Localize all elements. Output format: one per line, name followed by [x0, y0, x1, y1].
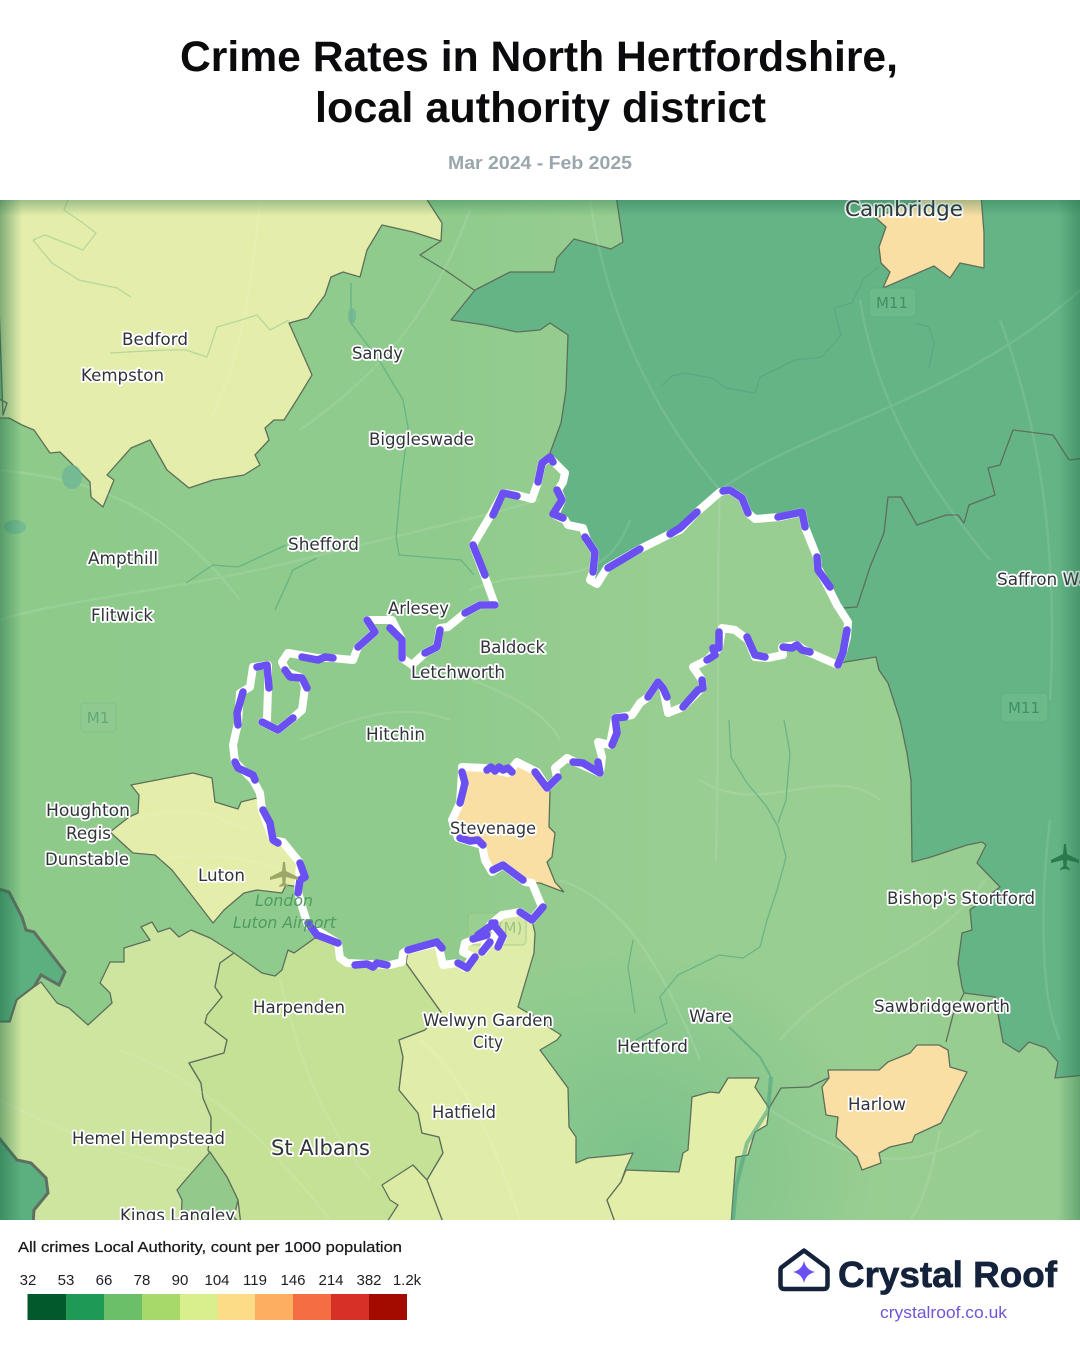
road shield: M1: M1: [87, 709, 109, 727]
district boundary: north of Central Bedfordshire: [420, 241, 474, 290]
subtitle: date range: Mar 2024 - Feb 2025: [448, 153, 632, 173]
place labels: Ware: [689, 1007, 732, 1026]
legend scale values: 32: [20, 1272, 36, 1289]
legend scale values: [20, 1272, 422, 1289]
road shield: M11 east: [1010, 702, 1039, 713]
place labels: Hatfield: [432, 1103, 496, 1122]
district: Welwyn Hatfield, pale yellow: [399, 912, 633, 1225]
place labels: Sawbridgeworth: [874, 997, 1010, 1016]
district: South Cambridgeshire and Uttlesford, dark green: [451, 195, 1080, 1078]
legend colour swatches: [28, 1294, 407, 1320]
place labels: Hertford: [617, 1037, 688, 1056]
legend scale values: 1.2k: [393, 1272, 422, 1289]
airport label: Luton Airport: [233, 913, 337, 932]
place labels: Houghton: [46, 801, 130, 820]
district: Stevenage, cream: [452, 762, 564, 892]
district: Buckinghamshire corner, dark green: [0, 888, 65, 1022]
road shield: M1: [81, 703, 116, 732]
map base: mid-green districts: [0, 200, 1080, 1220]
legend scale values: 53: [58, 1272, 74, 1289]
district: Luton, pale yellow: [110, 773, 300, 923]
district: Bedford, pale yellow: [0, 195, 442, 507]
district: Harlow, cream: [822, 1045, 967, 1170]
place labels: Shefford: [288, 535, 359, 554]
place labels: Hitchin: [366, 725, 425, 744]
place labels: Luton: [198, 866, 245, 885]
road shield: A1(M): (M): [498, 919, 522, 937]
place labels: Arlesey: [388, 599, 449, 618]
map rivers, thin teal lines: [33, 200, 934, 1220]
district: Uttlesford boundary line: [843, 430, 1080, 608]
legend scale values: 78: [134, 1272, 150, 1289]
district: Broxbourne, pale yellow: [607, 1078, 769, 1225]
legend scale values: 66: [96, 1272, 112, 1289]
district: Hertsmere corner, pale yellow: [382, 1165, 444, 1225]
place labels: Welwyn Garden: [423, 1011, 553, 1030]
title: local authority district: [315, 84, 766, 132]
road shield: M11 north: M11: [876, 294, 908, 312]
water patches: [4, 308, 356, 534]
airport label: London: [255, 891, 313, 910]
district: Dacorum, yellow green: [0, 922, 241, 1225]
icon: airport plane, Stansted: [1051, 844, 1079, 870]
place labels: Letchworth: [411, 663, 505, 682]
legend scale values: 214: [318, 1272, 344, 1289]
North Hertfordshire boundary, white line: [233, 458, 848, 968]
place labels: Bedford: [122, 330, 188, 349]
map edge vignette: [0, 200, 1080, 1220]
wordmark: Crystal Roof: [838, 1254, 1058, 1295]
East Hertfordshire darker south tint: [548, 1013, 806, 1220]
map roads, faint light lines: [0, 200, 1080, 1220]
district boundaries: East Hertfordshire south edge: [769, 993, 964, 1108]
district: St Albans, yellow green: [189, 938, 444, 1225]
place labels: Bishop's Stortford: [887, 889, 1035, 908]
legend scale values: 119: [243, 1272, 267, 1289]
legend scale values: 382: [356, 1272, 382, 1289]
place labels: City: [473, 1033, 503, 1052]
North Hertfordshire boundary, purple dashes: [235, 457, 847, 968]
legend scale values: 104: [204, 1272, 230, 1289]
district: Hillingdon corner, dark green: [0, 1133, 48, 1225]
road shield: M11 north: [878, 288, 907, 308]
logo: Crystal Roof: [780, 1250, 1058, 1322]
place labels: Biggleswade: [369, 430, 474, 449]
legend scale values: 90: [172, 1272, 188, 1289]
legend title: All crimes Local Authority, count per 1000 population: [18, 1239, 402, 1256]
road shield: A1(M): [468, 913, 526, 945]
place labels: Kings Langley: [120, 1206, 235, 1225]
icon: house with star: [780, 1250, 828, 1289]
place labels: Flitwick: [91, 606, 153, 625]
place labels: Regis: [66, 824, 111, 843]
website url: crystalroof.co.uk: [880, 1304, 1008, 1322]
place labels: Kempston: [81, 366, 164, 385]
place labels: Cambridge: [845, 197, 963, 221]
legend: [18, 1239, 422, 1320]
title: Crime Rates in North Hertfordshire,: [180, 33, 898, 81]
place labels: Harlow: [848, 1095, 906, 1114]
road shield: M11 east: M11: [1008, 699, 1040, 717]
legend scale values: 146: [280, 1272, 306, 1289]
place labels: Stevenage: [450, 819, 536, 838]
place labels: Sandy: [352, 344, 403, 363]
place labels: Ampthill: [88, 549, 158, 568]
place labels: Baldock: [480, 638, 545, 657]
icon: airport plane, Luton: [270, 862, 298, 887]
district: Three Rivers corner, green: [177, 1152, 241, 1225]
place labels: [45, 197, 1080, 1225]
district: Cambridge, cream: [876, 195, 984, 288]
place labels: Harpenden: [253, 998, 345, 1017]
map panel: [0, 195, 1080, 1225]
place labels: St Albans: [271, 1136, 370, 1160]
airport label: [233, 891, 337, 932]
place labels: Hemel Hempstead: [72, 1129, 225, 1148]
place labels: Dunstable: [45, 850, 129, 869]
title: [180, 33, 898, 132]
